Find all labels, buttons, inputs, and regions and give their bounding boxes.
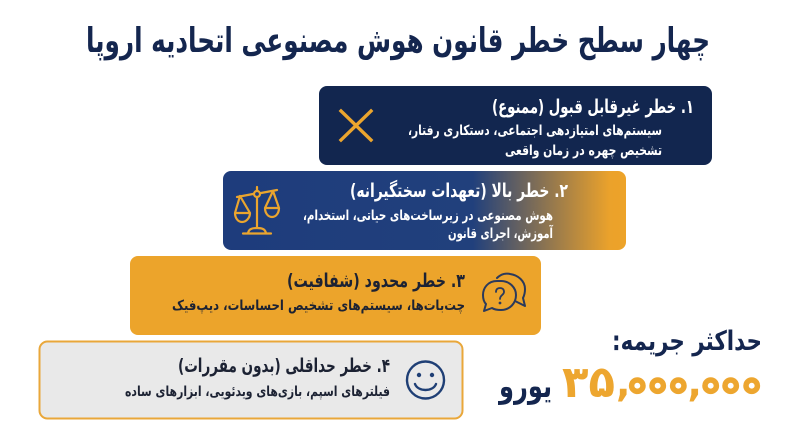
icon: smiley bbox=[407, 362, 444, 398]
number: fine amount: ۳۵ bbox=[562, 357, 615, 408]
unit: euro: یورو bbox=[497, 367, 552, 405]
heading: level 1: ۱. خطر غیرقابل قبول (ممنوع) bbox=[492, 96, 694, 118]
panel: minimal risk bbox=[40, 342, 462, 418]
number: fine amount bbox=[562, 357, 762, 408]
text: level 1 examples bbox=[408, 123, 662, 159]
panel: high risk bbox=[223, 171, 626, 250]
text: level 1 examples: تشخیص چهره در زمان واقعی bbox=[505, 143, 662, 159]
number: fine amount: ,۰۰۰,۰۰۰ bbox=[616, 361, 762, 405]
text: level 4 examples: فیلترهای اسپم، بازی‌های ویدئویی، ابزارهای ساده bbox=[125, 384, 390, 400]
text: level 2 examples: هوش مصنوعی در زیرساخت‌های حیاتی، استخدام، bbox=[303, 208, 553, 224]
callout: maximum fine bbox=[497, 326, 762, 408]
heading: level 4: ۴. خطر حداقلی (بدون مقررات) bbox=[178, 355, 390, 377]
panel: unacceptable risk bbox=[319, 86, 712, 165]
icon: scales bbox=[235, 187, 279, 234]
text: level 3 examples: چت‌بات‌ها، سیستم‌های تشخیص احساسات، دیپ‌فیک bbox=[172, 298, 465, 314]
text: level 2 examples: آموزش، اجرای قانون bbox=[448, 224, 554, 242]
text: level 2 examples bbox=[303, 208, 554, 242]
heading: level 2: ۲. خطر بالا (تعهدات سختگیرانه) bbox=[350, 179, 568, 202]
text: level 1 examples: سیستم‌های امتیازدهی اجتماعی، دستکاری رفتار، bbox=[408, 123, 662, 139]
panel: limited risk bbox=[130, 256, 541, 335]
icon: cross bbox=[341, 111, 371, 140]
icon: question speech bubbles bbox=[483, 274, 525, 311]
heading: level 3: ۳. خطر محدود (شفافیت) bbox=[287, 270, 465, 292]
label: maximum fine: حداکثر جریمه: bbox=[612, 326, 762, 357]
